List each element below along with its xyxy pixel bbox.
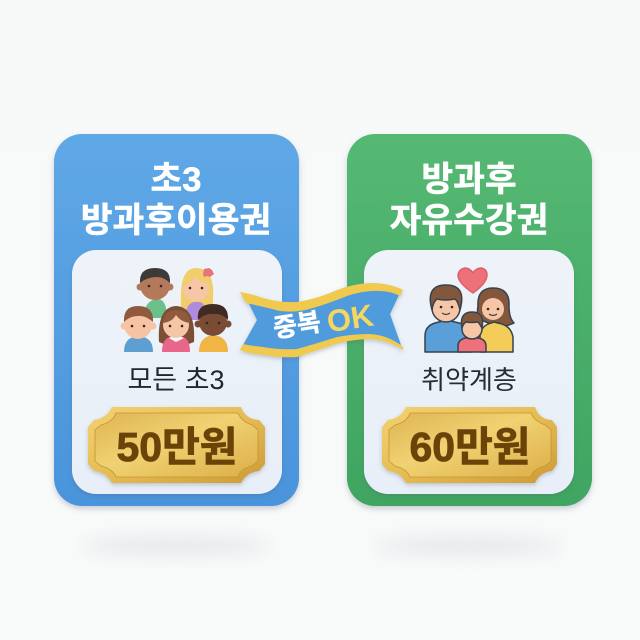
label: 모든 초3: 모든 초3	[127, 365, 225, 395]
price plaque: 50만원: 50만원	[116, 424, 238, 470]
icon: family with heart	[425, 268, 514, 352]
ribbon text: OK: OK	[324, 297, 376, 339]
icon: five children	[120, 268, 232, 352]
heading: 방과후 자유수강권: 자유수강권	[390, 202, 548, 240]
label: 취약계층: 취약계층	[421, 365, 517, 395]
heading: 초3 방과후이용권: 초3	[151, 161, 201, 199]
price plaque: 50만원	[88, 407, 265, 483]
inner card	[72, 250, 282, 494]
floor shadows	[80, 537, 564, 555]
heading: 초3 방과후이용권	[81, 161, 271, 240]
price plaque: 60만원	[382, 407, 557, 483]
heading: 방과후 자유수강권: 방과후	[421, 161, 517, 199]
panel: 방과후 자유수강권	[347, 134, 592, 506]
price plaque: 60만원: 60만원	[409, 424, 531, 470]
ribbon: 중복 OK	[240, 283, 403, 357]
heading: 초3 방과후이용권: 방과후이용권	[81, 202, 271, 240]
panel: 초3 방과후이용권	[54, 134, 299, 506]
inner card	[364, 250, 574, 494]
heading: 방과후 자유수강권	[390, 161, 548, 240]
ribbon text: 중복: 중복	[271, 306, 323, 344]
